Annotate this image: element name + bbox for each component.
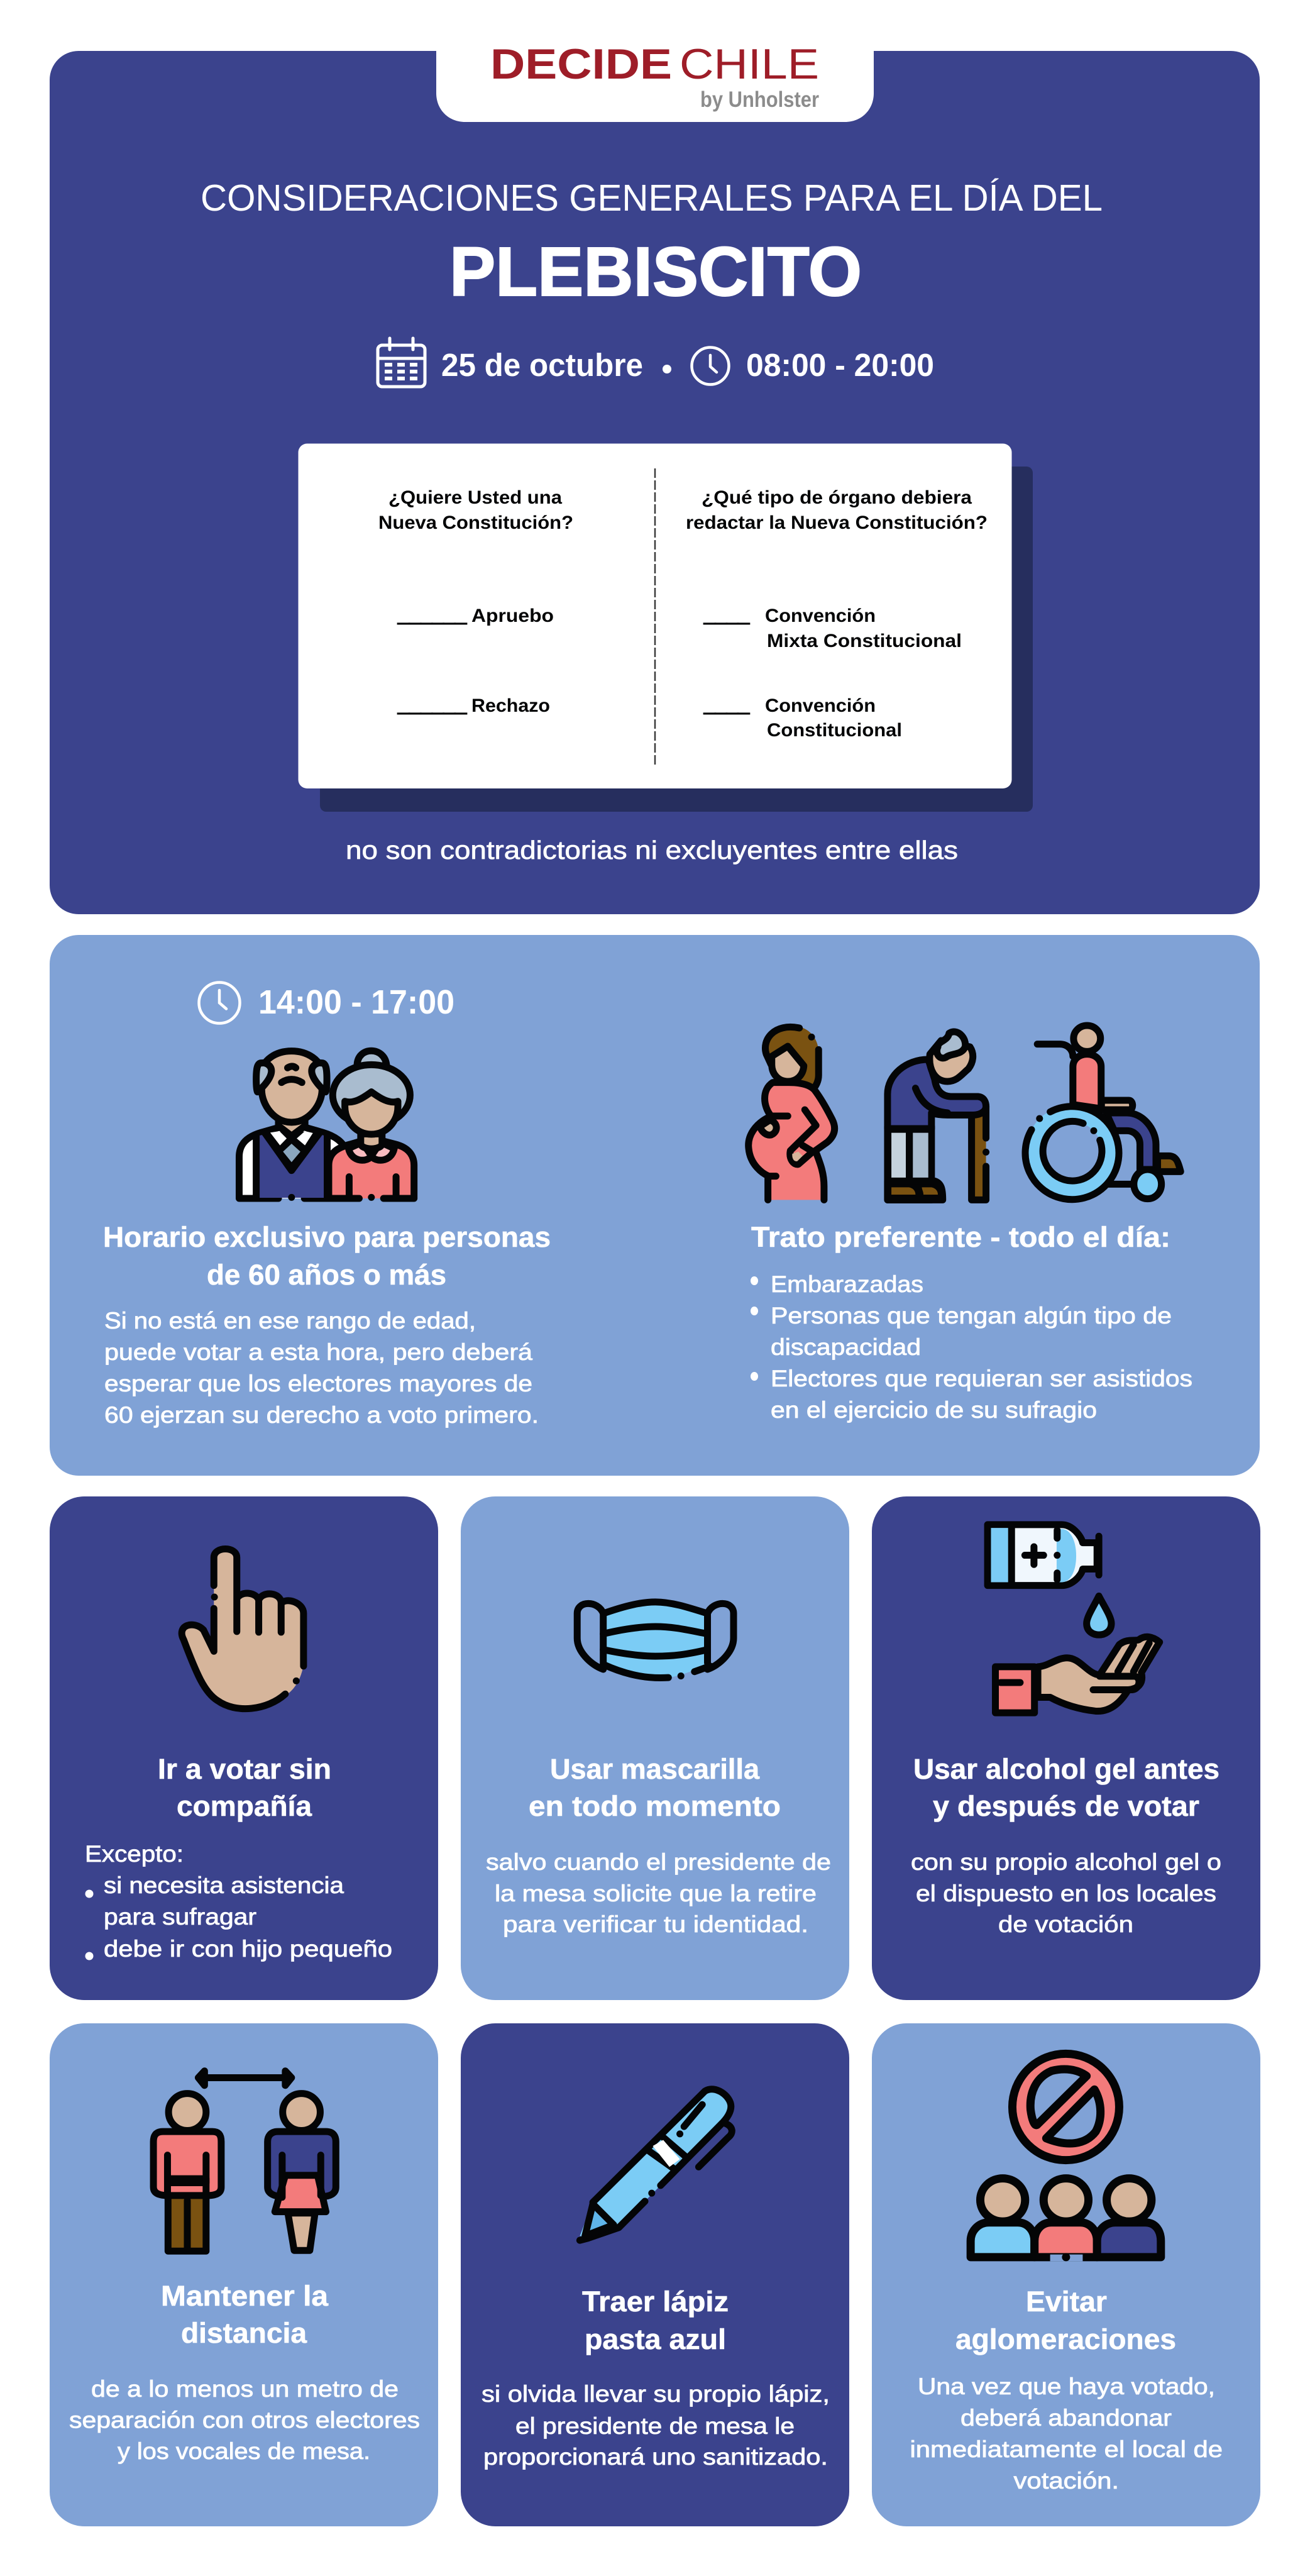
body text: separación con otros electores xyxy=(69,2407,420,2433)
icon: elderly man with cane xyxy=(888,1032,986,1200)
body text: la mesa solicite que la retire xyxy=(495,1881,817,1906)
exceptions list: Excepto: xyxy=(85,1841,184,1867)
icon: pen xyxy=(580,2089,732,2240)
heading xyxy=(955,2286,1176,2355)
heading: pasta azul xyxy=(585,2323,726,2355)
option: apruebo: Apruebo xyxy=(471,605,554,626)
block: preferential treatment: Personas que tengan algún tipo de xyxy=(771,1303,1172,1329)
block: exclusive schedule xyxy=(103,1221,551,1428)
card: keep distance xyxy=(50,2023,438,2526)
icon: elderly couple xyxy=(239,1051,414,1198)
block: exclusive schedule: Horario exclusivo para personas xyxy=(103,1221,551,1253)
heading: aglomeraciones xyxy=(955,2323,1176,2355)
body text xyxy=(482,2381,830,2470)
option: convencion constitucional: Constitucional xyxy=(767,720,902,741)
panel: header xyxy=(50,40,1260,914)
option: convencion constitucional xyxy=(703,695,902,741)
block: exclusive schedule: de 60 años o más xyxy=(207,1259,446,1291)
option: apruebo xyxy=(397,605,554,626)
heading: Ir a votar sin xyxy=(158,1753,331,1785)
body text: el presidente de mesa le xyxy=(515,2413,795,2439)
body text: Una vez que haya votado, xyxy=(918,2374,1215,2399)
question 1: Nueva Constitución? xyxy=(378,512,573,533)
block: preferential treatment: Trato preferente - todo el día: xyxy=(751,1221,1170,1253)
body text: inmediatamente el local de xyxy=(910,2436,1223,2462)
logo tab xyxy=(436,40,874,122)
card: avoid crowds xyxy=(872,2023,1260,2526)
logo tab: CHILE xyxy=(680,40,819,88)
option: rechazo: Rechazo xyxy=(471,695,550,716)
question 1: ¿Quiere Usted una xyxy=(388,487,562,508)
heading: Mantener la xyxy=(161,2280,329,2312)
body text xyxy=(910,2374,1223,2494)
body text xyxy=(911,1849,1221,1937)
heading: Traer lápiz xyxy=(582,2286,729,2318)
body text: con su propio alcohol gel o xyxy=(911,1849,1221,1875)
body text: y los vocales de mesa. xyxy=(118,2438,370,2464)
body text: de votación xyxy=(998,1911,1133,1937)
body text: de a lo menos un metro de xyxy=(91,2376,399,2402)
option: rechazo: ______ xyxy=(397,695,466,716)
logo tab: by Unholster xyxy=(700,87,819,112)
block: exclusive schedule: esperar que los electores mayores de xyxy=(104,1371,532,1396)
exclusive hours: 14:00 - 17:00 xyxy=(258,983,454,1021)
ballot shadow xyxy=(320,467,1033,812)
icon: person in wheelchair xyxy=(1025,1025,1181,1200)
card: vote alone xyxy=(50,1496,438,2000)
voting hours: 08:00 - 20:00 xyxy=(746,347,934,383)
option: apruebo: ______ xyxy=(397,605,466,626)
icon: pregnant woman xyxy=(749,1026,835,1200)
block: exclusive schedule: Si no está en ese rango de edad, xyxy=(104,1308,476,1334)
option: convencion mixta: Convención xyxy=(765,605,876,626)
card: face mask xyxy=(461,1496,849,2000)
option: rechazo xyxy=(397,695,550,716)
block: exclusive schedule: 60 ejerzan su derecho a voto primero. xyxy=(104,1402,539,1428)
heading: compañía xyxy=(177,1790,312,1822)
icon: two people with arrow xyxy=(153,2071,336,2251)
body text: si olvida llevar su propio lápiz, xyxy=(482,2381,830,2407)
body text: el dispuesto en los locales xyxy=(916,1881,1216,1906)
heading: y después de votar xyxy=(933,1790,1199,1822)
question 2: redactar la Nueva Constitución? xyxy=(686,512,988,533)
separator dot xyxy=(663,365,671,373)
block: preferential treatment: en el ejercicio de su sufragio xyxy=(771,1397,1097,1423)
icon: sanitizer bottle and hand xyxy=(988,1525,1160,1713)
icon: clock xyxy=(691,347,729,385)
body text: deberá abandonar xyxy=(960,2405,1172,2431)
option: convencion mixta xyxy=(703,605,962,651)
ballot xyxy=(298,444,1012,788)
body text xyxy=(486,1849,831,1937)
exceptions list: para sufragar xyxy=(104,1904,256,1930)
block: preferential treatment: Embarazadas xyxy=(771,1271,923,1297)
heading xyxy=(582,2286,729,2355)
date: 25 de octubre xyxy=(441,347,643,383)
block: preferential treatment: Electores que requieran ser asistidos xyxy=(771,1366,1192,1391)
exceptions list xyxy=(85,1841,392,1962)
title: PLEBISCITO xyxy=(449,233,862,311)
question 1 xyxy=(378,487,573,533)
heading: en todo momento xyxy=(529,1790,781,1822)
heading: Usar alcohol gel antes xyxy=(913,1753,1219,1785)
option: convencion constitucional: Convención xyxy=(765,695,876,716)
card: blue pen xyxy=(461,2023,849,2526)
heading: Usar mascarilla xyxy=(550,1753,760,1785)
heading xyxy=(529,1753,781,1822)
heading xyxy=(913,1753,1219,1822)
heading: Evitar xyxy=(1026,2286,1107,2318)
logo tab: DECIDE xyxy=(490,40,672,88)
body text: votación. xyxy=(1013,2468,1119,2494)
option: convencion mixta: ____ xyxy=(703,605,749,626)
icon: mask xyxy=(577,1602,734,1679)
block: preferential treatment: discapacidad xyxy=(771,1334,921,1360)
icon: calendar xyxy=(378,338,425,387)
icon: no crowds xyxy=(971,2054,1161,2261)
option: convencion constitucional: ____ xyxy=(703,695,749,716)
icon: clock xyxy=(199,982,240,1024)
icon: pointing hand xyxy=(182,1549,304,1709)
exceptions list: si necesita asistencia xyxy=(104,1872,344,1898)
block: exclusive schedule: puede votar a esta hora, pero deberá xyxy=(104,1339,532,1365)
question 2: ¿Qué tipo de órgano debiera xyxy=(702,487,972,508)
heading line: CONSIDERACIONES GENERALES PARA EL DÍA DEL xyxy=(201,177,1103,219)
question 2 xyxy=(686,487,988,533)
block: preferential treatment xyxy=(751,1221,1192,1423)
exceptions list: debe ir con hijo pequeño xyxy=(104,1936,392,1962)
card: hand sanitizer xyxy=(872,1496,1260,2000)
heading xyxy=(158,1753,331,1822)
body text xyxy=(69,2376,420,2464)
heading: distancia xyxy=(181,2317,307,2349)
body text: proporcionará uno sanitizado. xyxy=(483,2444,828,2470)
body text: salvo cuando el presidente de xyxy=(486,1849,831,1875)
body text: para verificar tu identidad. xyxy=(503,1911,808,1937)
option: convencion mixta: Mixta Constitucional xyxy=(767,631,962,651)
heading xyxy=(161,2280,329,2349)
panel: priority xyxy=(50,935,1260,1476)
footnote: no son contradictorias ni excluyentes entre ellas xyxy=(346,836,958,865)
